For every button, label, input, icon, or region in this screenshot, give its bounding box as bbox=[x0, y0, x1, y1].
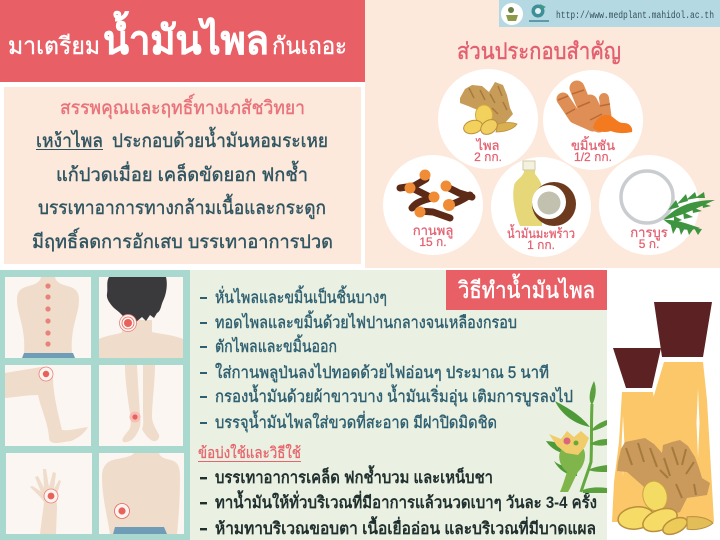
website bar bbox=[499, 0, 720, 27]
properties text: มีฤทธิ์ลดการอักเสบ บรรเทาอาการปวด bbox=[32, 227, 333, 253]
method steps: ทอดไพลและขมิ้นด้วยไฟปานกลางจนเหลืองกรอบ bbox=[215, 310, 517, 332]
icon: tall bottle bbox=[646, 302, 714, 522]
panel: method and usage bbox=[190, 270, 607, 540]
title banner: น้ำมันไพล bbox=[103, 11, 269, 63]
icon: galangal plant bbox=[546, 381, 607, 493]
ingredient: camphor: 5 ก. bbox=[639, 237, 659, 251]
cell: abdomen bbox=[99, 453, 184, 534]
title banner: มาเตรียม bbox=[8, 33, 100, 60]
ingredient: camphor bbox=[599, 155, 715, 255]
heading: properties: สรรพคุณและฤทธิ์ทางเภสัชวิทยา bbox=[60, 93, 305, 120]
ingredient: turmeric: ขมิ้นชัน bbox=[571, 136, 615, 153]
method steps: หั่นไพลและขมิ้นเป็นชิ้นบางๆ bbox=[215, 285, 387, 307]
ingredient: ginger: 2 กก. bbox=[474, 150, 502, 164]
method steps: กรองน้ำมันด้วยผ้าขาวบาง น้ำมันเริ่มอุ่น เติมการบูรลงไป bbox=[215, 384, 573, 407]
properties text: บรรเทาอาการทางกล้ามเนื้อและกระดูก bbox=[38, 194, 326, 219]
properties text: แก้ปวดเมื่อย เคล็ดขัดยอก ฟกช้ำ bbox=[56, 161, 308, 186]
usage list: ทาน้ำมันให้ทั่วบริเวณที่มีอาการแล้วนวดเบาๆ วันละ 3-4 ครั้ง bbox=[215, 490, 597, 512]
method steps: ใส่กานพลูป่นลงไปทอดด้วยไฟอ่อนๆ ประมาณ 5 นาที bbox=[215, 363, 549, 383]
title banner: กันเถอะ bbox=[272, 33, 347, 60]
title banner bbox=[0, 0, 365, 82]
properties text bbox=[32, 127, 333, 253]
icon: small bottle bbox=[612, 348, 661, 522]
cell: neck bbox=[99, 277, 183, 358]
ingredient: camphor: การบูร bbox=[630, 225, 668, 241]
ingredient: coconut oil: 1 กก. bbox=[527, 238, 555, 252]
properties text: ประกอบด้วยน้ำมันหอมระเหย bbox=[112, 127, 328, 152]
method steps bbox=[200, 285, 573, 433]
ingredient: turmeric bbox=[543, 70, 643, 170]
ingredient: cloves: กานพลู bbox=[413, 223, 453, 239]
ingredient: coconut oil: น้ำมันมะพร้าว bbox=[507, 224, 575, 241]
ingredient: turmeric: 1/2 กก. bbox=[574, 150, 612, 164]
heading: indications: ข้อบ่งใช้และวิธีใช้ bbox=[198, 444, 301, 462]
method steps: ตักไพลและขมิ้นออก bbox=[215, 334, 337, 356]
ingredient: ginger bbox=[438, 69, 538, 169]
panel: body pain illustrations bbox=[0, 270, 190, 540]
usage list: บรรเทาอาการเคล็ด ฟกช้ำบวม และเหน็บชา bbox=[215, 465, 493, 487]
panel: properties bbox=[4, 87, 361, 264]
cell: back bbox=[5, 277, 91, 358]
ingredient: cloves bbox=[383, 155, 483, 255]
cell: ankle bbox=[99, 365, 183, 446]
icon: ginger root bbox=[617, 438, 713, 538]
heading: ingredients: ส่วนประกอบสำคัญ bbox=[457, 38, 621, 64]
method heading: วิธีทำน้ำมันไพล bbox=[458, 274, 595, 303]
method heading bbox=[446, 270, 607, 310]
usage list: ห้ามทาบริเวณขอบตา เนื้อเยื่ออ่อน และบริเวณที่มีบาดแผล bbox=[215, 516, 596, 538]
properties text: เหง้าไพล bbox=[36, 130, 103, 152]
panel: ingredients bbox=[365, 0, 720, 268]
ingredient: ginger: ไพล bbox=[475, 138, 500, 153]
usage list bbox=[200, 465, 597, 538]
method steps: บรรจุน้ำมันไพลใส่ขวดที่สะอาด มีฝาปิดมิดชิด bbox=[215, 410, 497, 433]
cell: hand bbox=[6, 453, 92, 534]
cell: knee bbox=[5, 365, 91, 446]
ingredient: cloves: 15 ก. bbox=[419, 235, 447, 249]
panel: oil bottles with ginger bbox=[612, 302, 714, 538]
ingredient: coconut oil bbox=[491, 157, 591, 257]
